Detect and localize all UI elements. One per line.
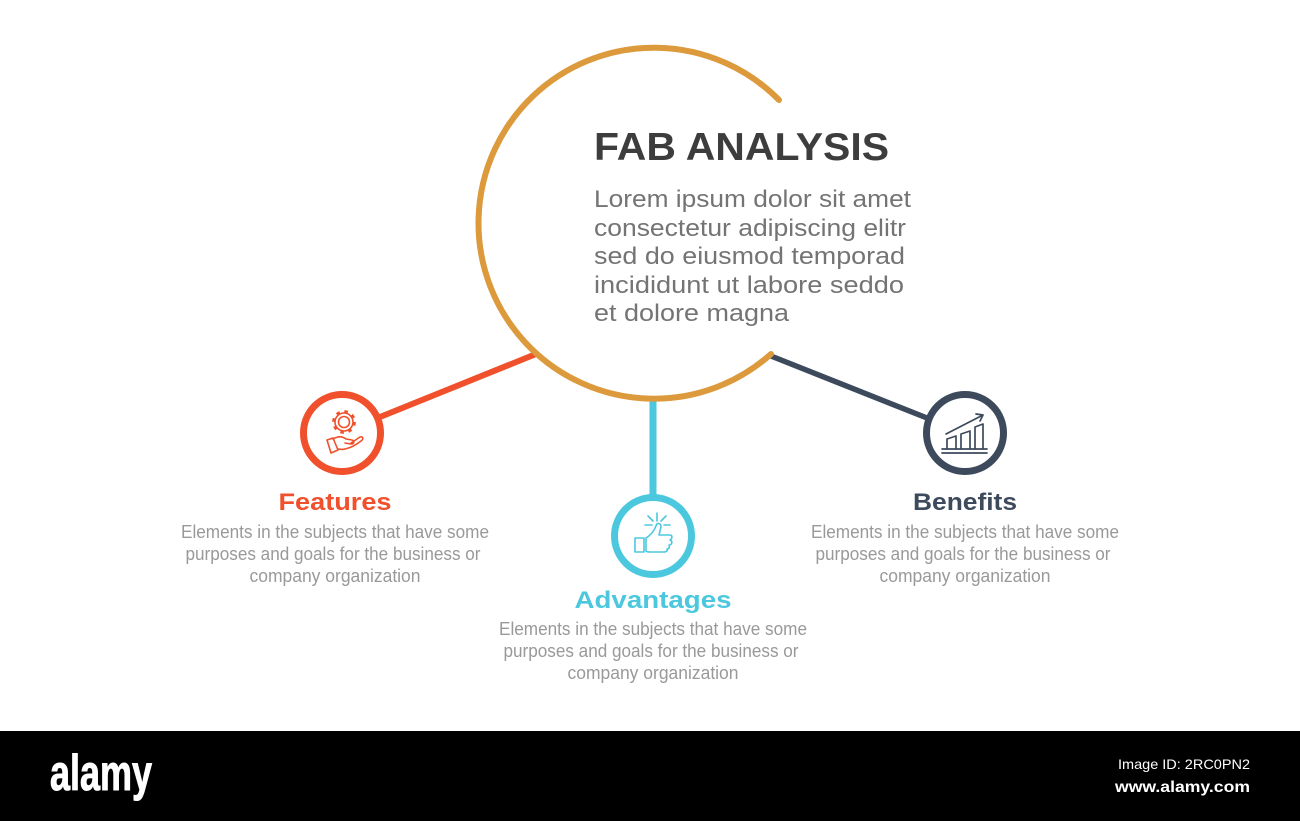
features description: [181, 522, 489, 586]
benefits heading: Benefits: [913, 489, 1017, 516]
features heading: Features: [278, 489, 392, 516]
connector: features: [380, 354, 536, 417]
benefits ring: [926, 394, 1004, 472]
benefits description: Elements in the subjects that have some: [811, 522, 1119, 542]
main text block: consectetur adipiscing elitr: [594, 215, 906, 242]
icon: hand with gear: [327, 411, 363, 453]
alamy logo: alamy: [50, 745, 152, 801]
benefits description: [811, 522, 1119, 586]
advantages heading: Advantages: [574, 587, 732, 614]
main open circle: [479, 48, 779, 399]
website: www.alamy.com: [1114, 779, 1250, 796]
advantages description: Elements in the subjects that have some: [499, 619, 807, 639]
main text block: sed do eiusmod temporad: [594, 243, 905, 270]
panel: benefits: [811, 394, 1119, 586]
image id: Image ID: 2RC0PN2: [1118, 756, 1250, 772]
icon: growth chart: [942, 414, 987, 453]
advantages description: purposes and goals for the business or: [504, 641, 798, 661]
features description: company organization: [250, 566, 420, 586]
features description: Elements in the subjects that have some: [181, 522, 489, 542]
connector: advantages: [650, 400, 656, 497]
panel: features: [181, 394, 489, 586]
benefits description: company organization: [880, 566, 1050, 586]
watermark bar: [0, 731, 1300, 821]
main text block: incididunt ut labore seddo: [594, 272, 904, 299]
main text block: et dolore magna: [594, 300, 790, 327]
main text block: Lorem ipsum dolor sit amet: [594, 186, 911, 213]
icon: thumbs up: [635, 513, 672, 552]
features description: purposes and goals for the business or: [186, 544, 480, 564]
benefits description: purposes and goals for the business or: [816, 544, 1110, 564]
panel: advantages: [499, 498, 807, 683]
main text block: [594, 186, 911, 327]
advantages ring: [614, 498, 692, 574]
title: FAB ANALYSIS: [594, 126, 889, 169]
advantages description: [499, 619, 807, 683]
advantages description: company organization: [568, 663, 738, 683]
connector: benefits: [771, 356, 927, 418]
features ring: [304, 394, 380, 472]
